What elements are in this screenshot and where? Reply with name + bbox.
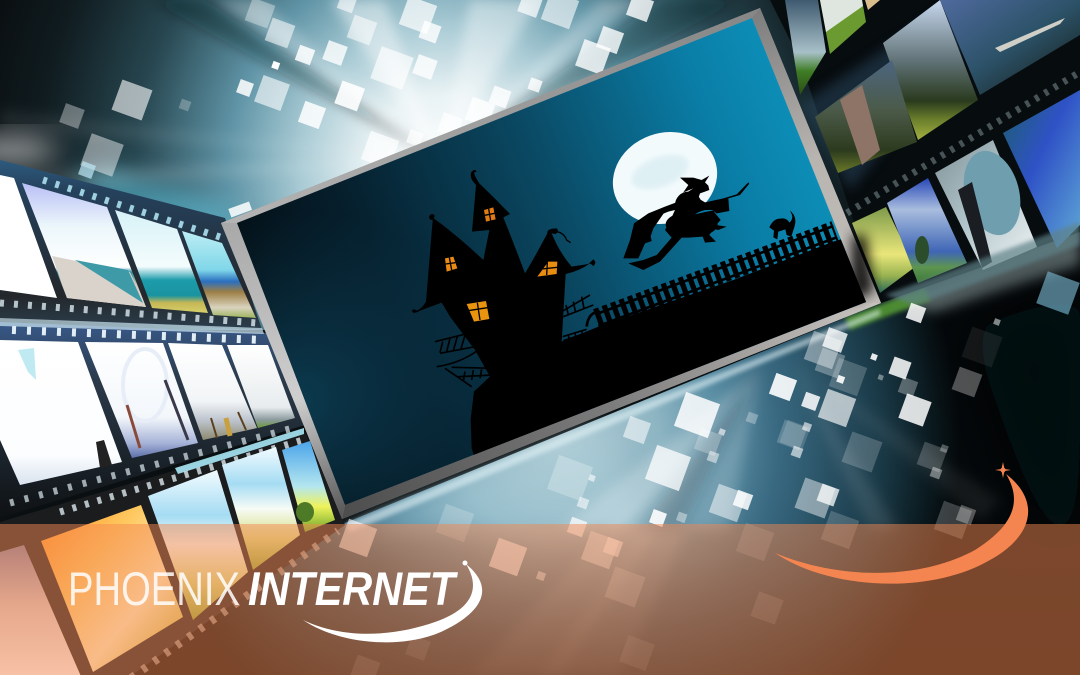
film strips: upper right <box>770 0 1080 305</box>
screen night sky <box>237 18 866 505</box>
screen bezel <box>221 8 881 519</box>
windows <box>445 207 557 322</box>
frame: harbor <box>940 0 1080 95</box>
wordmark: PHOENIX: PHOENIX <box>68 562 240 615</box>
frame: tan sliver <box>865 0 880 10</box>
weathervane <box>555 232 571 243</box>
film strip: middle left <box>0 318 305 518</box>
frame: mauve <box>0 545 83 675</box>
black cat <box>769 211 795 239</box>
frame: blue sky tree <box>887 178 967 283</box>
frame: headland <box>182 231 256 318</box>
frame: orange sunset <box>41 505 183 672</box>
sprocket holes: strip 2 <box>10 330 297 503</box>
fence pickets <box>597 231 835 319</box>
glass highlight below screen <box>345 309 880 532</box>
frame: headphones <box>85 342 198 458</box>
fence rails <box>587 226 837 327</box>
frame: mountains <box>815 60 917 173</box>
film strip: upper left <box>0 160 262 330</box>
orange swoosh with star <box>775 462 1028 584</box>
frame: blue sky field <box>222 447 300 570</box>
video screen <box>221 8 881 519</box>
house <box>412 170 595 448</box>
frame: tall trees <box>883 0 978 140</box>
frame: pier <box>227 345 295 428</box>
sprocket holes: right strip <box>847 72 1080 213</box>
scene silhouette <box>412 170 873 473</box>
frame: businessman and globe <box>935 140 1037 270</box>
white glare above left strip <box>0 137 58 163</box>
frame: city skyline <box>168 343 257 440</box>
frame: white washed <box>0 340 122 485</box>
frame: blue grid <box>1003 90 1080 248</box>
floating squares: upper <box>59 0 654 217</box>
white star <box>462 560 468 566</box>
frame: white-out <box>0 175 57 298</box>
frame: coast <box>115 210 208 313</box>
witch on broom <box>623 176 749 270</box>
ladders <box>435 295 593 387</box>
frame: clouds <box>148 470 248 620</box>
haze under right strip <box>885 225 1080 312</box>
green reflection <box>845 288 930 330</box>
frame: sunrise <box>852 207 915 293</box>
witch skirt and cape fill <box>650 192 718 236</box>
soft shadow across bezel corner <box>850 235 874 302</box>
frame: tree <box>282 441 335 532</box>
frame: beach <box>22 183 146 307</box>
film strip: lower left <box>0 428 345 675</box>
white swoosh <box>303 564 482 642</box>
frame: green field <box>820 0 866 54</box>
wordmark: INTERNET: INTERNET <box>248 562 459 615</box>
light band <box>0 318 264 334</box>
cyan light band <box>175 428 304 474</box>
floating squares: lower <box>339 271 1080 675</box>
frame: top park <box>785 0 826 95</box>
translucent brown band <box>0 524 1080 675</box>
sprocket holes: strip 3 <box>60 440 338 675</box>
ground <box>470 240 866 455</box>
sprocket holes: strip 1 <box>0 180 257 323</box>
background: lower reflected light <box>0 225 1080 675</box>
moon <box>612 132 718 224</box>
logo: Phoenix Internet <box>68 560 482 642</box>
lower right black shadow over sky <box>840 240 870 310</box>
